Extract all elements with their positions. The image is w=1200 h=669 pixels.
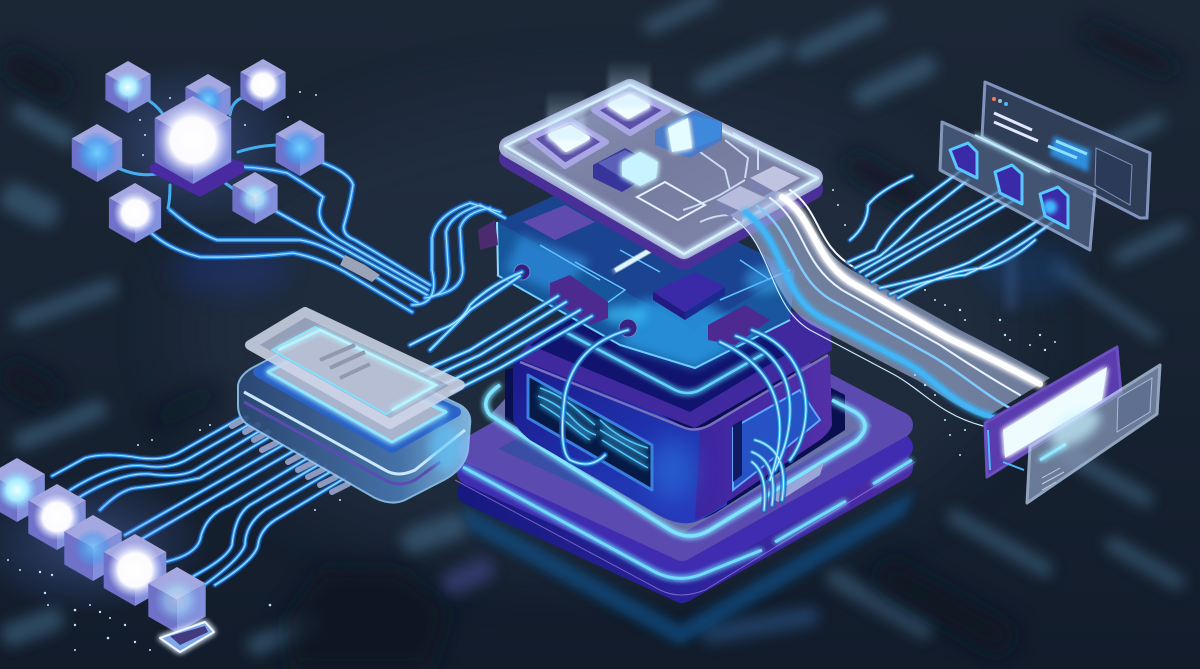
cube 2 xyxy=(28,484,86,550)
wires: bottom left fan xyxy=(52,418,348,588)
socket 3 xyxy=(1040,187,1068,228)
ribbon glass strands xyxy=(770,198,1020,395)
cube 5 xyxy=(148,567,206,633)
plate rim xyxy=(510,90,812,248)
block contact shadow xyxy=(505,320,845,521)
small chip xyxy=(160,622,214,652)
platform shadow glow xyxy=(462,490,915,645)
chip: glowing right xyxy=(594,60,668,133)
particles: sparkles xyxy=(7,91,1056,651)
glass layer glow xyxy=(614,246,656,272)
chip: glowing left xyxy=(530,90,606,166)
platform neon ring xyxy=(486,385,865,536)
cube 4 xyxy=(104,534,166,606)
glass layer purple chip left xyxy=(523,205,595,240)
cluster: top left cubes xyxy=(72,59,324,243)
cube A xyxy=(105,61,151,113)
panel: lower right output screens xyxy=(985,250,1160,503)
back window panel xyxy=(982,82,1150,218)
tray body xyxy=(238,335,470,503)
platform lower layer xyxy=(470,362,900,590)
purple frame xyxy=(985,347,1121,477)
cube D xyxy=(72,124,122,182)
white glowing slot xyxy=(1003,367,1107,458)
cube C xyxy=(240,59,286,111)
front glass card xyxy=(1027,365,1160,503)
panel: top glass plate xyxy=(505,60,818,259)
cube H xyxy=(109,183,161,243)
block screen with circuit traces xyxy=(528,375,652,490)
tray top neon frame xyxy=(258,345,456,448)
cube B xyxy=(185,74,231,126)
panel: middle glass circuit layer xyxy=(478,175,795,368)
panel: base platform xyxy=(455,320,915,645)
chip: small blocks xyxy=(593,110,722,192)
block side port xyxy=(733,390,824,502)
platform top surface xyxy=(470,320,900,548)
connector: upper left xyxy=(478,220,498,250)
big cube E xyxy=(155,96,231,184)
cube G xyxy=(232,172,278,224)
plate underside xyxy=(510,101,812,259)
front socket panel xyxy=(940,122,1095,250)
cube 3 xyxy=(64,515,122,581)
glass layer central chip xyxy=(653,272,725,320)
wire clamp xyxy=(340,255,380,282)
platform middle layer xyxy=(470,342,900,570)
short links between cubes xyxy=(112,97,280,208)
reflection xyxy=(1005,250,1017,310)
plate neon edge xyxy=(505,85,818,254)
socket 1 xyxy=(950,143,977,178)
block right face xyxy=(695,355,832,520)
tray side glow xyxy=(429,423,461,471)
connector: port nodes xyxy=(514,264,530,280)
socket 2 xyxy=(995,165,1022,204)
plate traces xyxy=(683,133,758,222)
chip: warning tabs xyxy=(716,166,800,222)
block left face xyxy=(513,345,727,523)
wires: central bundles xyxy=(410,272,806,510)
cube 1 xyxy=(0,458,45,522)
wires: to upper right sockets xyxy=(848,170,1058,298)
cable: main glass ribbon xyxy=(730,190,1050,426)
connector: right purple xyxy=(708,305,770,345)
panel: central block xyxy=(513,260,832,523)
connector: left purple xyxy=(550,275,608,325)
platform neon outer strips xyxy=(463,460,912,578)
cube F xyxy=(276,120,324,176)
panel: upper right screens xyxy=(940,82,1150,250)
tray glass lid xyxy=(250,312,460,424)
ribbon white core xyxy=(782,197,1040,384)
cluster: bottom left cubes xyxy=(0,458,214,652)
panel: left glass tray xyxy=(238,312,470,503)
block top face xyxy=(516,260,832,428)
plate surface xyxy=(510,90,812,248)
wire ferrules xyxy=(232,418,348,492)
wires: top left network xyxy=(112,97,505,312)
ribbon blue strands xyxy=(745,212,995,418)
big cube base xyxy=(150,150,245,197)
